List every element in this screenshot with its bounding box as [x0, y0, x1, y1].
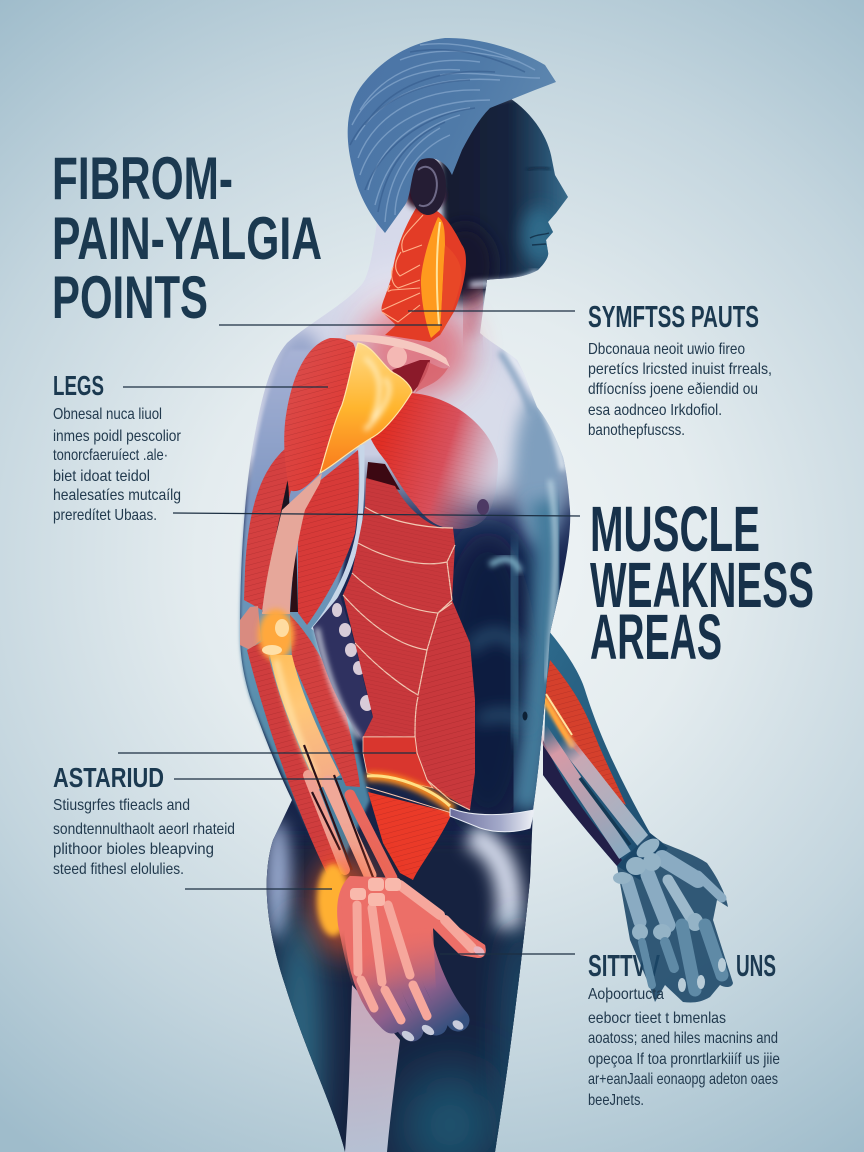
text block: Sitting lungs body: ar+eanJaali eonaopg adeton oaes — [588, 1071, 778, 1088]
right forearm muscle — [544, 660, 626, 805]
text block: Astariud: steed fithesl elolulies. — [53, 861, 184, 878]
title — [52, 145, 322, 331]
text block: Legs: tonorcfaeruíect .ale· — [53, 447, 168, 464]
neck tones — [361, 276, 391, 324]
right forearm bones — [540, 728, 625, 855]
heading: muscle weakness areas — [590, 493, 814, 673]
text block: Symptoms paths: Dbconaua neoit uwio fireo — [588, 341, 745, 358]
text block: Legs: Obnesal nuca liuol — [53, 406, 162, 423]
text block: Legs: healesatíes mutcaílg — [53, 487, 181, 504]
forearm tendons — [304, 745, 374, 880]
text block: Sitting lungs body: opeçoa If toa pronrtlarkiiíf us jiie — [588, 1051, 780, 1068]
text block: Symptoms paths: SYMFTSS PAUTS — [588, 299, 759, 334]
lower red trapezoid — [368, 792, 452, 880]
collarbone and shoulder joint — [346, 334, 450, 395]
triceps — [244, 447, 291, 610]
shoulder glow — [320, 343, 412, 473]
right arm — [540, 630, 668, 880]
text block: Legs: inmes poidl pescolior — [53, 428, 182, 445]
text block: Legs: biet idoat teidol — [53, 468, 150, 485]
text block: Astariud: sondtennulthaolt aeorl rhateid — [53, 821, 235, 838]
nipple — [477, 499, 489, 515]
lower forearm muscle outer — [247, 640, 350, 880]
elbow glow — [258, 609, 294, 661]
face shading — [436, 100, 568, 296]
leader lines — [118, 311, 580, 954]
right hand x-ray — [613, 833, 733, 1002]
text block: Sitting lungs body — [588, 986, 780, 1109]
text label: Sitting lungs heading (behind hand) — [588, 948, 776, 983]
text label: Sitting lungs heading (behind hand): UNS — [736, 948, 776, 983]
dark under armpit — [366, 462, 400, 490]
ear — [410, 157, 446, 215]
elbow block — [240, 606, 261, 650]
palm — [337, 876, 486, 1000]
lower block — [363, 737, 433, 788]
text block: Sitting lungs body: beeJnets. — [588, 1092, 644, 1109]
text block: Astariud: plithoor bioles bleapving — [53, 841, 214, 858]
text block: Symptoms paths: peretícs lricsted inuist frreals, — [588, 361, 772, 378]
text block: Symptoms paths: dffíocníss joene eðiendid ou — [588, 381, 758, 398]
neck muscles — [382, 180, 466, 342]
title: PAIN-YALGIA — [52, 205, 322, 272]
fingertip nails — [400, 1018, 465, 1043]
fingers — [356, 930, 458, 1030]
hair — [348, 38, 556, 233]
hand bones — [357, 885, 472, 1020]
title: POINTS — [52, 264, 208, 331]
text block: Symptoms paths: banothepfuscss. — [588, 422, 685, 439]
hip glow — [367, 777, 453, 810]
deltoid — [284, 338, 356, 491]
text block: Sitting lungs body: Aoþoortucta — [588, 986, 664, 1003]
wrist glow — [313, 855, 377, 955]
left arm muscles — [240, 338, 412, 880]
text label: Sitting lungs heading (behind hand): SITTVV — [588, 948, 660, 983]
heading: muscle weakness areas: MUSCLE — [590, 493, 760, 565]
text block: Symptoms paths: esa aodnceo Irkdofiol. — [588, 402, 722, 419]
arm outer rim — [240, 350, 370, 880]
red glow around neck and shoulder — [360, 302, 470, 398]
spine — [313, 595, 395, 745]
abdomen — [438, 530, 538, 830]
body silhouette — [230, 80, 590, 1152]
neck strap glow — [421, 217, 445, 338]
text block: Astariud: ASTARIUD — [53, 762, 164, 793]
rib muscle bands — [343, 507, 470, 810]
leg tones — [250, 840, 550, 1152]
heading: muscle weakness areas: AREAS — [590, 601, 722, 673]
arm inner rim — [313, 445, 362, 630]
text block: Sitting lungs body: aoatoss; aned hiles macnins and — [588, 1030, 778, 1047]
lips and eye — [530, 233, 549, 245]
pale leg strip — [345, 985, 400, 1152]
radius bone glow — [270, 655, 340, 790]
text block: Legs — [53, 370, 182, 524]
humerus strip — [262, 473, 322, 614]
text block: Astariud — [53, 762, 235, 878]
forearm tendon strips — [308, 775, 392, 878]
rib muscle base — [343, 478, 475, 810]
text block: Sitting lungs body: eebocr tieet t bmenlas — [588, 1010, 726, 1027]
human figure — [230, 38, 733, 1152]
text block: Astariud: Stiusgrfes tfieacls and — [53, 797, 190, 814]
left hand — [313, 855, 486, 1043]
dark gap — [262, 478, 290, 612]
text block: Legs: LEGS — [53, 370, 104, 401]
forearm muscle inner — [290, 615, 360, 787]
text block: Legs: preredítet Ubaas. — [53, 507, 157, 524]
text block: Symptoms paths — [588, 299, 772, 439]
waistband — [450, 808, 534, 832]
biceps — [298, 450, 359, 625]
title: FIBROM- — [52, 145, 233, 212]
ribs area — [313, 462, 534, 880]
pectoral muscle — [370, 393, 498, 529]
